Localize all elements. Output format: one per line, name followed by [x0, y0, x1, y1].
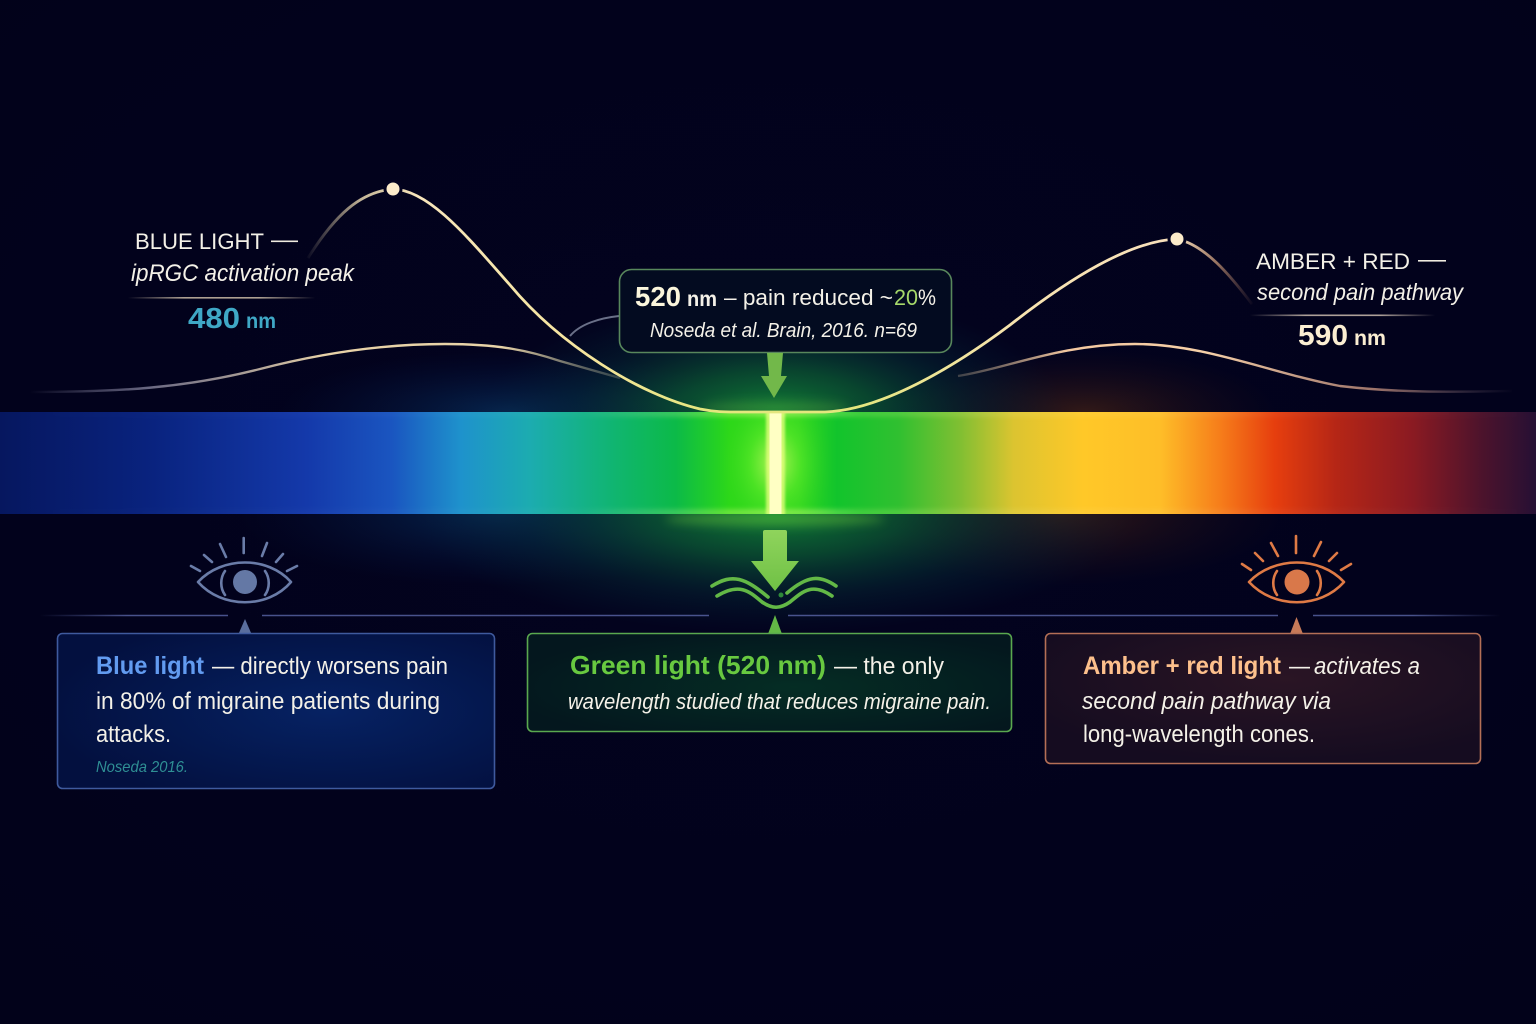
panel: blue light: in 80% of migraine patients during	[96, 688, 440, 715]
low intensity curve: blue side	[28, 344, 620, 392]
connector to callout	[570, 316, 619, 336]
pointer: blue	[238, 619, 252, 634]
callout: 520 nm result: nm	[687, 288, 717, 311]
label: blue light: nm	[246, 310, 276, 333]
panel: green light	[528, 634, 1012, 732]
panel: amber and red light: second pain pathway via	[1082, 688, 1331, 715]
panel: amber and red light: activates a	[1314, 653, 1420, 680]
callout: 520 nm result: – pain reduced ~	[724, 285, 893, 310]
low intensity curve: amber side	[958, 344, 1512, 392]
panel: amber and red light: —	[1289, 653, 1310, 680]
icon: blue eye	[191, 538, 297, 602]
callout: 520 nm result: 520	[635, 281, 681, 312]
main response curve	[308, 189, 1252, 412]
panel: amber and red light: long-wavelength cones.	[1083, 721, 1315, 748]
label: amber and red: 590	[1298, 320, 1348, 352]
panel: blue light: Noseda 2016.	[96, 759, 188, 776]
peak marker: amber	[1169, 231, 1185, 247]
peak marker: blue	[385, 181, 401, 197]
520 nm beam	[766, 408, 785, 518]
panel: green light: wavelength studied that reduces migraine pain.	[568, 689, 991, 714]
panel: green light: — the only	[834, 653, 944, 680]
panel: amber and red light	[1046, 634, 1480, 764]
label: amber and red: second pain pathway	[1257, 279, 1464, 305]
arrow: callout to band	[761, 353, 787, 398]
horizontal rule	[40, 614, 1500, 616]
panel: green light: Green light (520 nm)	[570, 650, 826, 680]
label: amber and red: nm	[1354, 327, 1386, 350]
label: amber and red	[1250, 249, 1464, 352]
panel: blue light: Blue light	[96, 652, 205, 680]
panel: blue light: — directly worsens pain	[212, 653, 448, 680]
halo above and below band	[665, 401, 885, 526]
spectrum glow	[240, 292, 1280, 634]
panel: amber and red light: Amber + red light	[1083, 652, 1282, 680]
panel: blue light	[58, 634, 494, 788]
icon: amber eye	[1242, 536, 1351, 602]
label: blue light: 480	[188, 303, 240, 335]
panel: blue light: attacks.	[96, 721, 171, 748]
spectrum band	[0, 412, 1536, 514]
label: blue light: BLUE LIGHT	[135, 229, 264, 254]
callout: 520 nm result: 20	[894, 285, 918, 310]
pointer: green	[768, 615, 782, 634]
callout: 520 nm result: Noseda et al. Brain, 2016. n=69	[650, 320, 917, 342]
icon: green arrow into waves	[712, 530, 836, 607]
callout: 520 nm result: %	[918, 285, 936, 310]
callout: 520 nm result	[620, 270, 952, 352]
label: blue light	[128, 229, 356, 335]
pointer: amber	[1290, 617, 1303, 634]
label: blue light: ipRGC activation peak	[131, 260, 356, 287]
label: amber and red: AMBER + RED	[1256, 249, 1410, 274]
